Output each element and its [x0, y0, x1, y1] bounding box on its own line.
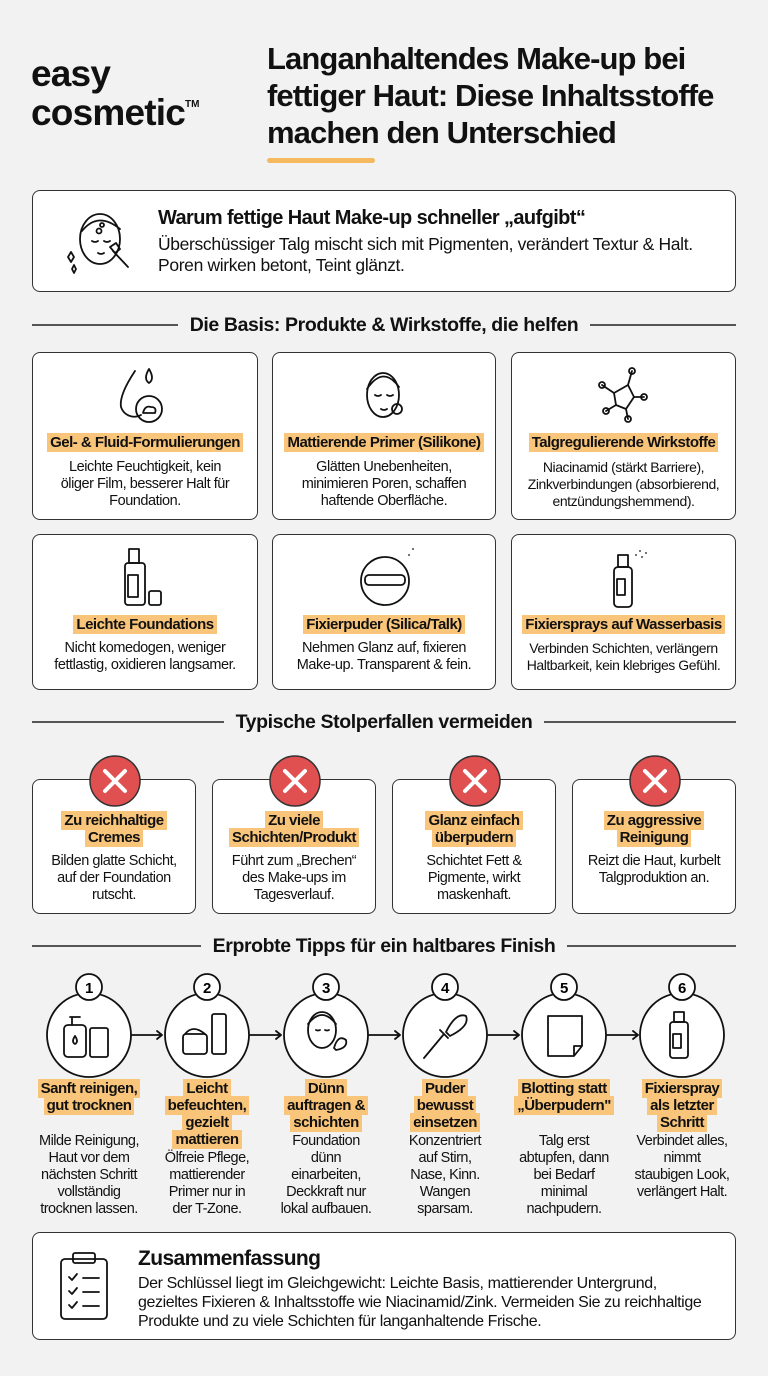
summary text: Der Schlüssel liegt im Gleichgewicht: Leichte Basis, mattierender Untergrund,: [138, 1275, 657, 1292]
step 5: Blotting statt: [521, 1080, 607, 1097]
icon: red x: [449, 755, 501, 807]
title: fettiger Haut: Diese Inhaltsstoffe: [267, 78, 714, 113]
card: Fixiersprays: Verbinden Schichten, verlängern: [529, 640, 718, 656]
step flow: circles, numbers, arrows: 1: [85, 980, 93, 997]
pitfall 2: [212, 779, 376, 914]
pitfall 4: Talgproduktion an.: [599, 870, 709, 886]
step 2: gezielt: [185, 1114, 229, 1131]
section heading: Stolperfallen: Typische Stolperfallen vermeiden: [236, 710, 532, 732]
text: Talg erst: [539, 1133, 589, 1149]
icon: powder puff: [360, 548, 414, 606]
pitfall 3: Glanz einfach: [428, 812, 520, 829]
pitfall 3: Pigmente, wirkt: [428, 870, 520, 886]
text: Foundation: [292, 1133, 360, 1149]
title: Langanhaltendes Make-up bei: [267, 41, 685, 76]
pitfall 2: Schichten/Produkt: [232, 829, 356, 846]
pitfall 1: rutscht.: [92, 887, 136, 903]
logo: easy: [31, 53, 110, 94]
summary box: [32, 1232, 736, 1340]
icon: drops: [120, 368, 163, 423]
title underline: [267, 158, 375, 163]
card: Fixierpuder: Fixierpuder (Silica/Talk): [306, 616, 462, 633]
step flow: circles, numbers, arrows: 2: [203, 980, 211, 997]
text: Haut vor dem: [48, 1150, 130, 1166]
text: verlängert Halt.: [637, 1184, 727, 1200]
text: dünn: [311, 1150, 341, 1166]
icon: red x: [269, 755, 321, 807]
text: auf Stirn,: [418, 1150, 472, 1166]
card: Leichte Foundations: fettlastig, oxidieren langsamer.: [54, 657, 236, 673]
text: nächsten Schritt: [41, 1167, 137, 1183]
text: trocknen lassen.: [40, 1201, 138, 1217]
pitfall 4: Reizt die Haut, kurbelt: [588, 853, 720, 869]
step 3: Dünn: [308, 1080, 344, 1097]
card: Talgregulierende Wirkstoffe: entzündungshemmend).: [552, 493, 694, 509]
card: Fixiersprays: Haltbarkeit, kein klebriges Gefühl.: [527, 657, 720, 673]
step 6: als letzter: [650, 1097, 714, 1114]
text: Ölfreie Pflege,: [165, 1150, 249, 1166]
icon: red x: [629, 755, 681, 807]
pitfall 2: Zu viele: [268, 812, 320, 829]
summary text: [138, 1275, 702, 1330]
text: bei Bedarf: [533, 1167, 595, 1183]
card: Mattierende Primer: Mattierende Primer (Silikone): [287, 434, 481, 451]
card: Fixierpuder: Nehmen Glanz auf, fixieren: [302, 640, 466, 656]
pitfall 4: [572, 779, 736, 914]
card: Gel & Fluid: [32, 352, 258, 520]
text: staubigen Look,: [635, 1167, 729, 1183]
step 1: [38, 1079, 140, 1217]
text: minimal: [541, 1184, 587, 1200]
step 2: mattieren: [175, 1131, 239, 1148]
step 2: [165, 1079, 249, 1217]
card: Gel & Fluid: Leichte Feuchtigkeit, kein: [69, 459, 221, 475]
card: Gel & Fluid: Gel- & Fluid-Formulierungen: [50, 434, 240, 451]
pitfall 1: [32, 779, 196, 914]
pitfall 1: auf der Foundation: [57, 870, 171, 886]
intro box: [32, 190, 736, 292]
title: [267, 41, 714, 150]
text: nachpudern.: [526, 1201, 602, 1217]
text: Konzentriert: [409, 1133, 481, 1149]
icon: clipboard: [60, 1252, 108, 1320]
logo: cosmeticTM: [31, 92, 199, 133]
text: vollständig: [57, 1184, 120, 1200]
pitfall 3: [392, 779, 556, 914]
card: Leichte Foundations: Leichte Foundations: [76, 616, 214, 633]
step 6: Fixierspray: [645, 1080, 719, 1097]
intro text: [158, 234, 693, 275]
card: Talgregulierende Wirkstoffe: Zinkverbindungen (absorbierend,: [528, 476, 719, 492]
intro text: Überschüssiger Talg mischt sich mit Pigmenten, verändert Textur & Halt.: [158, 234, 693, 254]
text: Nase, Kinn.: [410, 1167, 480, 1183]
pitfall 2: Tagesverlauf.: [254, 887, 334, 903]
intro text: Poren wirken betont, Teint glänzt.: [158, 255, 405, 275]
pitfall 1: Zu reichhaltige: [64, 812, 164, 829]
card: Mattierende Primer: [272, 352, 496, 520]
summary heading: Zusammenfassung: [138, 1247, 320, 1270]
section heading: Die Basis: Die Basis: Produkte & Wirkstoffe, die helfen: [190, 314, 578, 336]
summary text: Produkte und zu viele Schichten für langanhaltende Frische.: [138, 1313, 541, 1330]
icon: molecule: [598, 367, 648, 423]
intro heading: Warum fettige Haut Make-up schneller „aufgibt“: [158, 207, 585, 229]
step flow: circles, numbers, arrows: [46, 973, 725, 1078]
text: Wangen: [420, 1184, 470, 1200]
pitfall 1: Cremes: [88, 829, 140, 846]
step 4: bewusst: [417, 1097, 473, 1114]
pitfall 2: Führt zum „Brechen“: [232, 853, 356, 869]
step 1: gut trocknen: [47, 1097, 131, 1114]
card: Gel & Fluid: öliger Film, besserer Halt für: [61, 476, 229, 492]
icon: spray bottle: [613, 550, 647, 608]
step 5: „Überpudern": [517, 1097, 611, 1114]
step 5: [514, 1079, 614, 1217]
step 3: schichten: [293, 1114, 359, 1131]
step flow: circles, numbers, arrows: 6: [678, 980, 686, 997]
card: Talgregulierende Wirkstoffe: Talgregulierende Wirkstoffe: [532, 434, 715, 451]
pitfall 3: überpudern: [435, 829, 513, 846]
pitfall 4: Reinigung: [620, 829, 688, 846]
logo: [31, 53, 199, 133]
icon: red x: [89, 755, 141, 807]
text: lokal aufbauen.: [281, 1201, 371, 1217]
step 1: Sanft reinigen,: [41, 1080, 137, 1097]
text: der T-Zone.: [172, 1201, 242, 1217]
pitfall 3: maskenhaft.: [437, 887, 511, 903]
step 2: befeuchten,: [168, 1097, 246, 1114]
pitfall 3: Schichtet Fett &: [426, 853, 522, 869]
card: Gel & Fluid: Foundation.: [109, 493, 181, 509]
text: nimmt: [664, 1150, 700, 1166]
card: Talgregulierende Wirkstoffe: [511, 352, 736, 520]
icon: face: [366, 372, 403, 418]
step flow: circles, numbers, arrows: 3: [322, 980, 330, 997]
card: Mattierende Primer: minimieren Poren, schaffen: [302, 476, 466, 492]
step 6: Schritt: [660, 1114, 704, 1131]
card: Mattierende Primer: Glätten Unebenheiten,: [316, 459, 452, 475]
step 2: Leicht: [186, 1080, 228, 1097]
title: machen den Unterschied: [267, 115, 616, 150]
summary text: gezieltes Fixieren & Inhaltsstoffe wie Niacinamid/Zink. Vermeiden Sie zu reichhaltige: [138, 1294, 701, 1311]
text: mattierender: [169, 1167, 245, 1183]
step 3: [281, 1079, 371, 1217]
card: Leichte Foundations: Nicht komedogen, weniger: [65, 640, 225, 656]
pitfall 1: Bilden glatte Schicht,: [51, 853, 177, 869]
step 4: Puder: [425, 1080, 465, 1097]
icon: face with brush: [67, 213, 129, 274]
section heading: Tipps: Erprobte Tipps für ein haltbares Finish: [213, 934, 555, 956]
card: Fixiersprays: Fixiersprays auf Wasserbasis: [525, 616, 722, 633]
text: Deckkraft nur: [286, 1184, 366, 1200]
card: Talgregulierende Wirkstoffe: Niacinamid (stärkt Barriere),: [543, 459, 704, 475]
text: sparsam.: [417, 1201, 473, 1217]
step flow: circles, numbers, arrows: 4: [441, 980, 450, 997]
card: Fixierpuder: [272, 534, 496, 690]
pitfall 2: des Make-ups im: [242, 870, 346, 886]
text: Verbindet alles,: [636, 1133, 728, 1149]
step 3: auftragen &: [287, 1097, 365, 1114]
icon: foundation bottle: [124, 548, 162, 606]
text: einarbeiten,: [291, 1167, 361, 1183]
text: abtupfen, dann: [519, 1150, 609, 1166]
step flow: circles, numbers, arrows: 5: [560, 980, 568, 997]
pitfall 4: Zu aggressive: [607, 812, 701, 829]
card: Fixiersprays: [511, 534, 736, 690]
card: Mattierende Primer: haftende Oberfläche.: [321, 493, 447, 509]
card: Fixierpuder: Make-up. Transparent & fein.: [297, 657, 471, 673]
text: Primer nur in: [169, 1184, 245, 1200]
card: Leichte Foundations: [32, 534, 258, 690]
step 6: [634, 1079, 729, 1200]
text: Milde Reinigung,: [39, 1133, 139, 1149]
step 4: einsetzen: [413, 1114, 477, 1131]
step 4: [409, 1079, 482, 1217]
